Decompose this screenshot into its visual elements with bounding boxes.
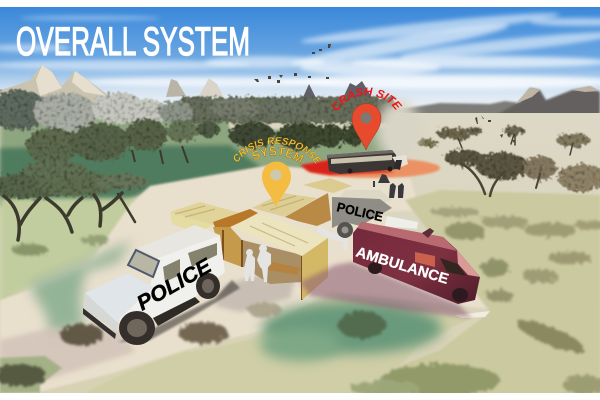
label: system: SYSTEM: [252, 146, 304, 164]
foreground acacias, left: [0, 160, 148, 240]
shelter: roof stripes: [175, 196, 308, 246]
tree trunks, back row: [132, 146, 188, 164]
pale sand road: [0, 165, 500, 393]
shelter: back module: [285, 193, 331, 226]
pin: crash site: [352, 104, 381, 150]
dark tree row: [26, 119, 367, 164]
jeep: side windows: [163, 243, 217, 282]
jeep: rear wheel: [196, 273, 220, 299]
shelter: left roof: [170, 202, 240, 225]
pale forest band: [0, 90, 395, 131]
shelter: middle roof: [252, 193, 317, 217]
green ground, left: [0, 118, 390, 305]
lower-right olive ground: [83, 190, 600, 395]
bushes: [0, 207, 600, 396]
jeep: front grille: [83, 293, 118, 332]
pin: crisis response system: [262, 162, 291, 207]
shelter: left panel: [170, 212, 213, 229]
distant mountains, right: [401, 86, 600, 113]
jeep: front wheel: [119, 311, 155, 345]
label: crash site: CRASH SITE: [332, 88, 402, 110]
jeep: roof: [138, 225, 220, 258]
jeep: shadow: [118, 280, 240, 342]
label: crisis response: CRISIS RESPONSE: [234, 137, 322, 164]
distant mountains, centre: [303, 81, 372, 100]
ambulance: body: [353, 222, 480, 304]
shelter: front roof: [230, 213, 328, 256]
jeep: hood: [85, 273, 153, 323]
jeep: bumper: [83, 308, 116, 339]
shelter: timber body: [213, 227, 242, 267]
ambulance: beacon: [422, 228, 434, 238]
police jeep, foreground: [83, 225, 240, 345]
acacias, right: [417, 126, 600, 196]
distant mountains, left: [0, 65, 224, 104]
shelter: back-right roof: [303, 178, 352, 193]
jeep: windshield: [128, 250, 159, 277]
crisis response shelter: [170, 178, 352, 300]
ambulance: windscreen: [457, 250, 480, 277]
far plain and sand ground: [0, 113, 600, 393]
flying birds: [254, 44, 515, 143]
shelter: front wall panel: [302, 238, 328, 300]
shelter: posts: [223, 230, 302, 300]
jeep: body side: [118, 235, 225, 330]
ambulance: [353, 222, 480, 304]
people near the crash: [373, 174, 404, 198]
crashed bus: [327, 150, 408, 174]
jeep: label: POLICE: [133, 254, 216, 315]
shelter: interior: [242, 240, 302, 284]
ambulance: wheels: [368, 262, 382, 274]
dust cloud at crash site: [376, 100, 420, 160]
label: police rear car: POLICE: [335, 199, 385, 225]
title: OVERALL SYSTEM: [16, 20, 250, 64]
shelter: counter: [268, 262, 300, 275]
shelter: timber beam: [213, 209, 258, 230]
sky with clouds: [0, 7, 600, 112]
jeep: underbody: [153, 297, 200, 326]
ambulance: side window: [415, 252, 435, 267]
ambulance: roof: [357, 222, 457, 251]
ambulance road shadow: [300, 262, 472, 318]
ambulance: cab window: [440, 258, 466, 276]
white figures: [244, 226, 348, 282]
crash-zone ground markings: [300, 158, 440, 178]
ambulance: label: AMBULANCE: [354, 245, 451, 288]
police car, rear vehicle: [332, 190, 418, 238]
